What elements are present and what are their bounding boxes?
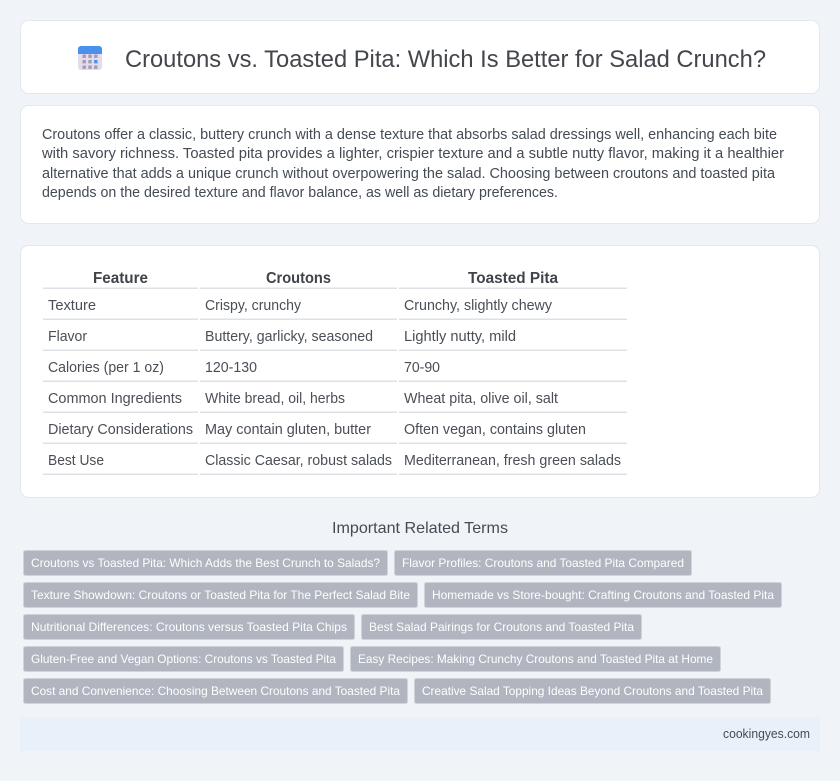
tag 2: Flavor Profiles: Croutons and Toasted Pita Compared (402, 556, 684, 570)
row: calories: 70-90 (404, 360, 440, 376)
tag 10 (414, 678, 770, 704)
row: best use: Best Use (48, 453, 104, 469)
row: dietary considerations: May contain gluten, butter (205, 422, 371, 438)
row: flavor: Lightly nutty, mild (404, 329, 516, 345)
tag 7 (24, 646, 344, 672)
row: texture: Crispy, crunchy (205, 298, 302, 314)
tag 4: Homemade vs Store-bought: Crafting Croutons and Toasted Pita (432, 588, 774, 602)
tag 6 (362, 614, 642, 640)
row: flavor (43, 329, 627, 351)
tag 10: Creative Salad Topping Ideas Beyond Croutons and Toasted Pita (422, 684, 763, 698)
tag 1 (24, 550, 388, 576)
tag 7: Gluten-Free and Vegan Options: Croutons vs Toasted Pita (31, 652, 336, 666)
heading: related terms: Important Related Terms (332, 520, 508, 537)
intro paragraph: depends on the desired texture and flavor balance, as well as dietary preferences. (42, 185, 558, 201)
row: dietary considerations: Often vegan, contains gluten (404, 422, 586, 438)
tag 3: Texture Showdown: Croutons or Toasted Pita for The Perfect Salad Bite (31, 588, 410, 602)
intro paragraph: alternative that adds a unique crunch without overpowering the salad. Choosing between croutons and toasted pita (42, 166, 775, 182)
intro paragraph (41, 127, 784, 201)
panel: introduction (20, 106, 820, 224)
intro paragraph: Croutons offer a classic, buttery crunch with a dense texture that absorbs salad dressings well, enhancing each bite (42, 127, 777, 143)
related term tags (24, 550, 782, 704)
row: texture: Texture (48, 298, 96, 314)
row: calories (43, 360, 627, 382)
table header: Croutons (266, 270, 331, 287)
tag 8 (350, 646, 720, 672)
row: dietary considerations: Dietary Considerations (48, 422, 193, 438)
tag 9 (24, 678, 408, 704)
row: best use: Mediterranean, fresh green salads (404, 453, 621, 469)
tag 5: Nutritional Differences: Croutons versus Toasted Pita Chips (31, 620, 347, 634)
intro paragraph: with savory richness. Toasted pita provides a lighter, crispier texture and a subtle nutty flavor, making it a healthier (41, 146, 784, 162)
footer (20, 717, 820, 751)
row: best use: Classic Caesar, robust salads (205, 453, 392, 469)
footer source text: cookingyes.com (723, 726, 810, 741)
row: calories: 120-130 (205, 360, 257, 376)
row: dietary considerations (43, 422, 627, 444)
row: best use (43, 453, 627, 475)
row: calories: Calories (per 1 oz) (48, 360, 164, 376)
panel: title header (20, 20, 820, 94)
tag 2 (394, 550, 692, 576)
row: common ingredients: Wheat pita, olive oil, salt (404, 391, 558, 407)
panel: comparison table (20, 246, 820, 498)
title: Croutons vs. Toasted Pita: Which Is Better for Salad Crunch? (125, 46, 766, 73)
table header: Feature (93, 270, 148, 287)
tag 5 (24, 614, 354, 640)
row: flavor: Buttery, garlicky, seasoned (205, 329, 373, 345)
icon: calendar (78, 46, 102, 70)
tag 1: Croutons vs Toasted Pita: Which Adds the Best Crunch to Salads? (31, 556, 380, 570)
tag 9: Cost and Convenience: Choosing Between Croutons and Toasted Pita (31, 684, 400, 698)
table header (43, 270, 627, 289)
row: common ingredients (43, 391, 627, 413)
tag 8: Easy Recipes: Making Crunchy Croutons and Toasted Pita at Home (358, 652, 713, 666)
tag 3 (24, 582, 418, 608)
row: common ingredients: Common Ingredients (48, 391, 182, 407)
row: texture: Crunchy, slightly chewy (404, 298, 553, 314)
row: common ingredients: White bread, oil, herbs (205, 391, 345, 407)
table header: Toasted Pita (468, 270, 558, 287)
tag 4 (424, 582, 782, 608)
row: flavor: Flavor (48, 329, 87, 345)
tag 6: Best Salad Pairings for Croutons and Toasted Pita (369, 620, 634, 634)
row: texture (43, 298, 627, 320)
